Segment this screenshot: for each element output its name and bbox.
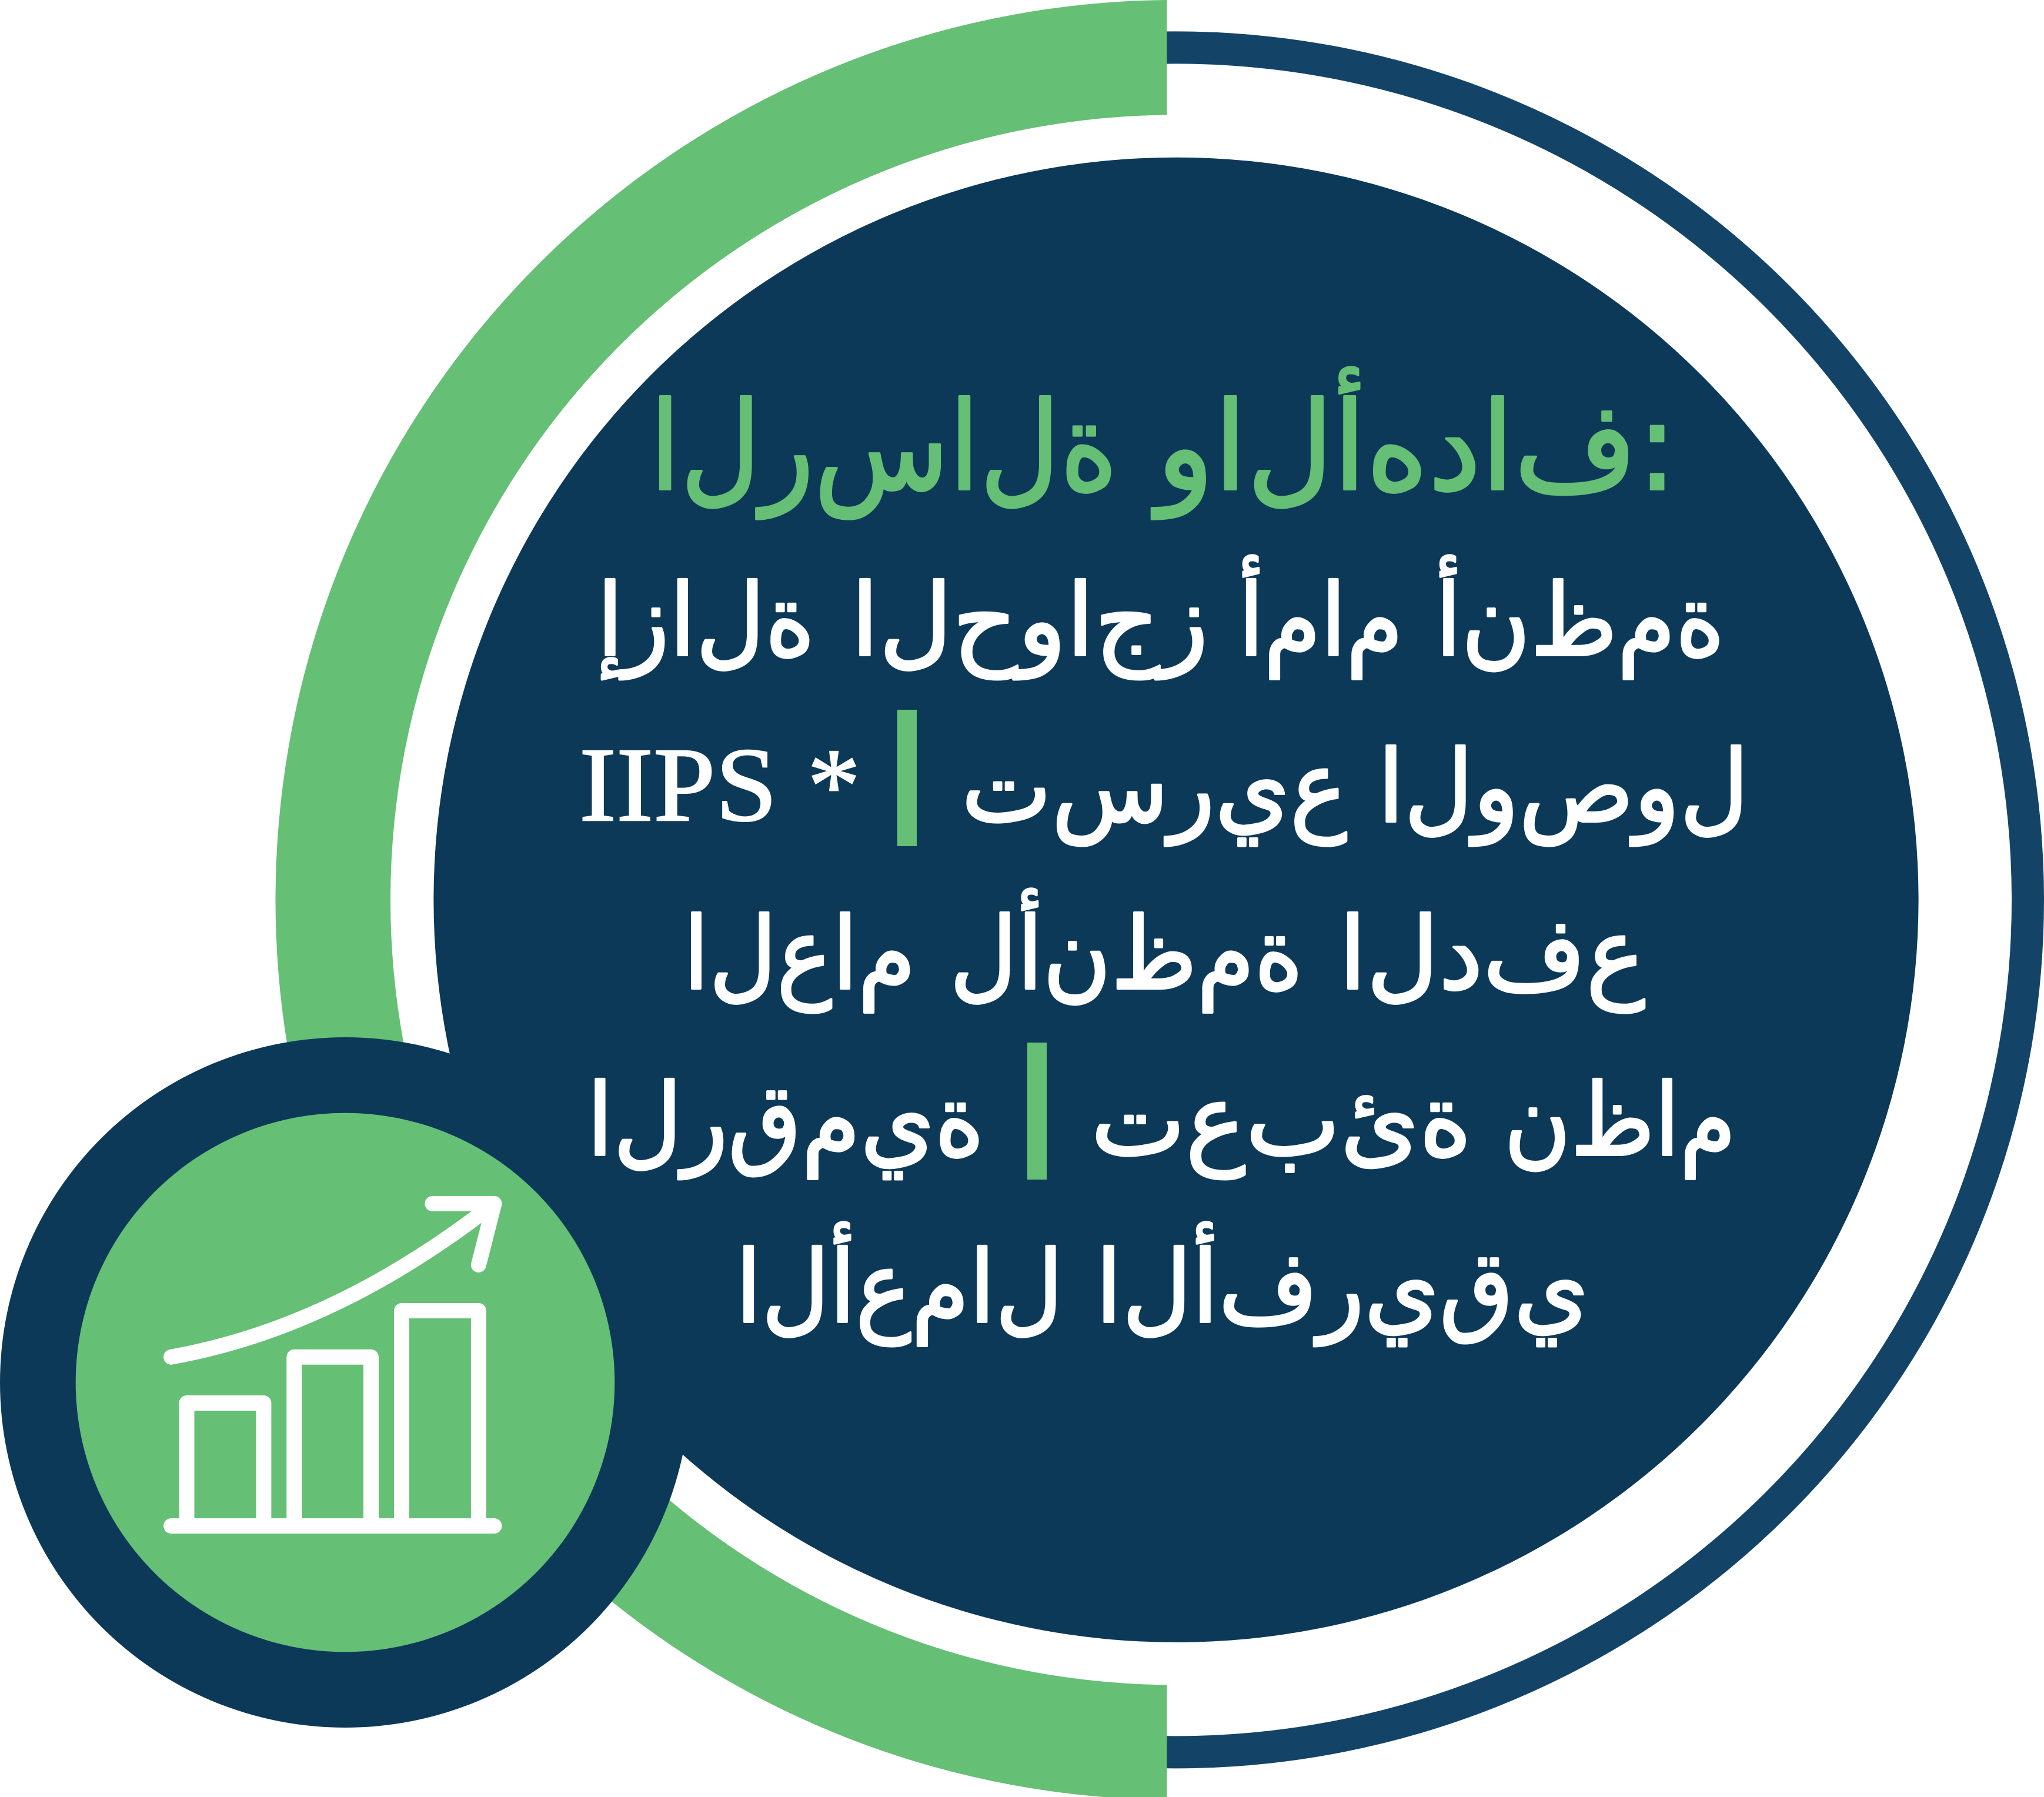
text line 4: ا‌ل‌ر‌ق‌م‌ي‌ة	[587, 1063, 984, 1179]
text line 2	[579, 710, 1749, 846]
text line 2: ا‌ل‌و‌ص‌و‌ل	[1378, 729, 1749, 846]
title	[650, 367, 1677, 519]
text line 1: ا‌ل‌ح‌و‌ا‌ج‌ز	[851, 563, 1208, 680]
navy outer ring	[323, 48, 2028, 1752]
text line 4: ت‌ع‌ب‌ئ‌ة	[1091, 1063, 1472, 1179]
main dark circle panel	[433, 158, 1919, 1642]
text line 4: ن‌ظ‌ا‌م	[1504, 1063, 1736, 1179]
text line 1: أ‌ن‌ظ‌م‌ة	[1435, 555, 1725, 679]
text line 2: *	[807, 727, 860, 844]
text line 2: ت‌س‌ر‌ي‌ع	[961, 729, 1347, 846]
text line 3: ا‌ل‌ع‌ا‌م	[683, 896, 916, 1013]
icon: rising bar chart with arrow	[171, 1204, 494, 1526]
icon badge: dark circle with green centre	[0, 1037, 690, 1728]
title: و‌ا‌ل‌أ‌ه‌د‌ا‌ف‌:	[1151, 367, 1677, 519]
green half ring	[275, 0, 1167, 1797]
text line 1: إ‌ز‌ا‌ل‌ة	[597, 563, 815, 680]
text line 3: ا‌ل‌د‌ف‌ع	[1339, 896, 1645, 1013]
text line 5: ا‌ل‌أ‌ف‌ر‌ي‌ق‌ي	[1096, 1222, 1589, 1346]
text line 1	[597, 555, 1725, 680]
text line 3	[683, 889, 1645, 1013]
text line 4	[587, 1043, 1736, 1180]
text line 1: أ‌م‌ا‌م	[1238, 555, 1403, 679]
title: ا‌ل‌ر‌س‌ا‌ل‌ة	[650, 376, 1118, 519]
text line 3: ل‌أ‌ن‌ظ‌م‌ة	[950, 889, 1303, 1013]
text line 5: ا‌ل‌أ‌ع‌م‌ا‌ل	[736, 1222, 1063, 1346]
text line 5	[736, 1222, 1589, 1346]
text line 2: IIPS	[579, 726, 777, 843]
